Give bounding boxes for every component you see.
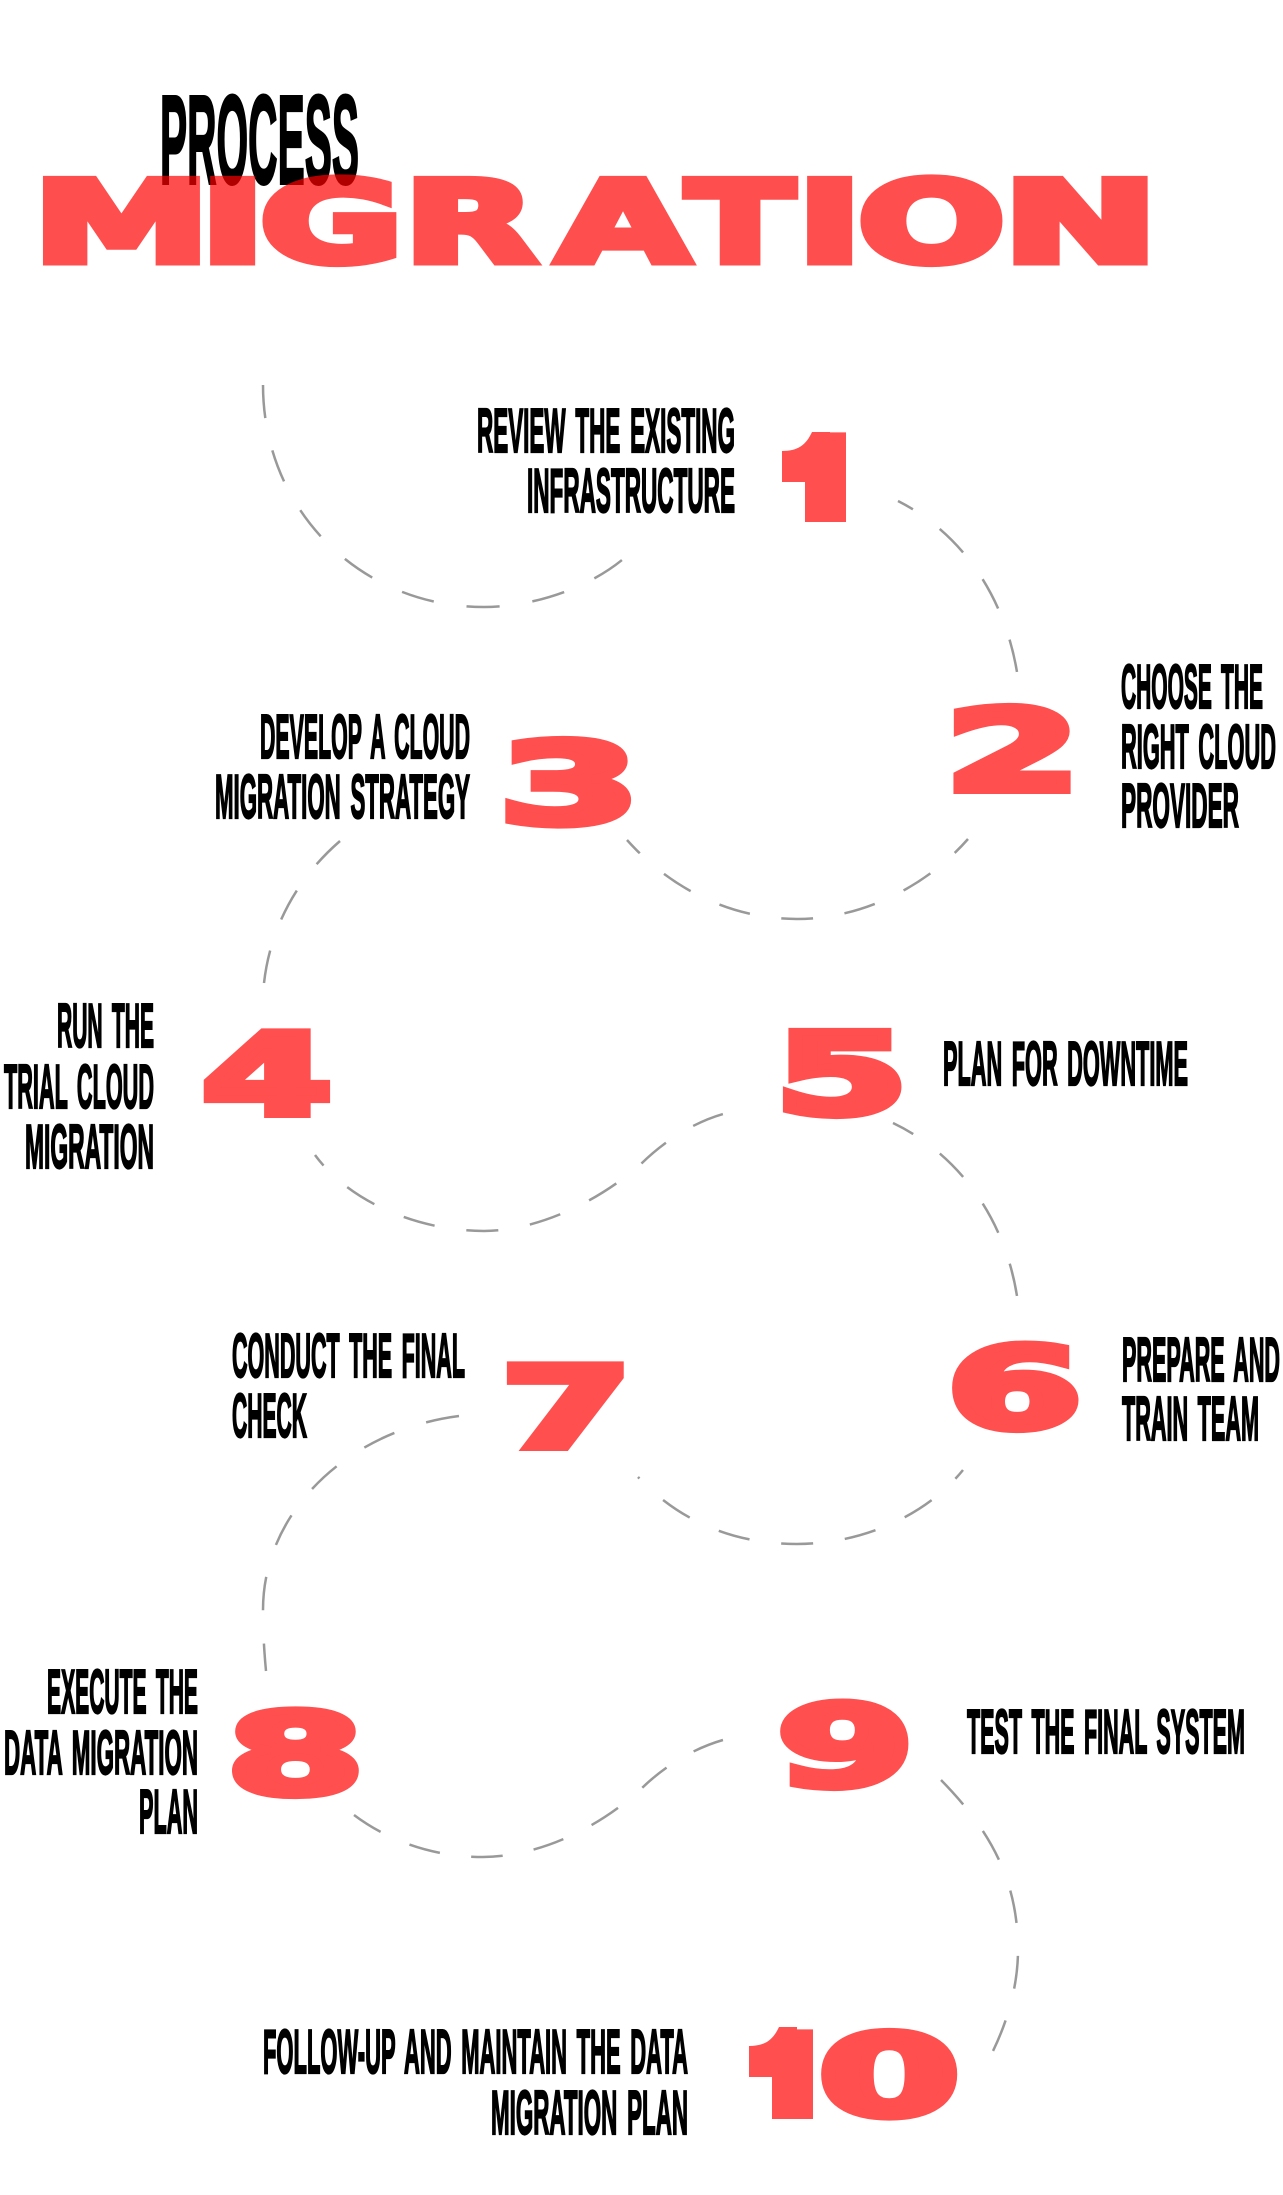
text: INFRASTRUCTURE bbox=[527, 456, 735, 526]
step 4 number: 4 bbox=[202, 1011, 332, 1141]
step 8 label bbox=[4, 1657, 198, 1847]
text: RUN THE bbox=[57, 991, 154, 1061]
step 8 number: 8 bbox=[227, 1690, 364, 1820]
text: CONDUCT THE FINAL bbox=[232, 1321, 465, 1391]
step 3 label bbox=[215, 702, 470, 832]
heading: migration: M bbox=[33, 158, 210, 288]
step 3 number: 3 bbox=[499, 720, 640, 850]
step 2 label bbox=[1121, 652, 1276, 841]
step 6 label bbox=[1122, 1325, 1280, 1454]
step 6 number: 6 bbox=[947, 1324, 1082, 1454]
heading: migration: O bbox=[858, 158, 1005, 288]
step 7 label: CHECK bbox=[232, 1381, 307, 1451]
step 10 number: 1 bbox=[727, 2012, 849, 2142]
text: TRIAL CLOUD bbox=[4, 1052, 154, 1122]
heading: migration: G bbox=[260, 158, 403, 288]
text: EXECUTE THE bbox=[47, 1657, 198, 1727]
heading: migration: R bbox=[404, 158, 536, 288]
text: MIGRATION bbox=[25, 1112, 154, 1182]
heading: migration: I bbox=[797, 158, 862, 288]
heading: migration: A bbox=[557, 158, 689, 288]
text: DATA MIGRATION bbox=[4, 1718, 198, 1788]
step 10 number bbox=[749, 2027, 958, 2121]
step 7 number: 7 bbox=[501, 1344, 632, 1474]
step 1 number: 1 bbox=[760, 415, 882, 545]
step 5 number: 5 bbox=[775, 1010, 908, 1140]
step 10 label bbox=[263, 2017, 688, 2148]
text: MIGRATION STRATEGY bbox=[215, 762, 470, 832]
text: PROCESS bbox=[160, 70, 359, 210]
text: DEVELOP A CLOUD bbox=[260, 702, 470, 772]
text: PLAN bbox=[139, 1777, 198, 1847]
heading: migration: T bbox=[687, 158, 794, 288]
heading: migration: N bbox=[1003, 158, 1158, 288]
text: REVIEW THE EXISTING bbox=[477, 396, 735, 466]
step 4 label bbox=[4, 991, 154, 1182]
step 1 label bbox=[477, 396, 735, 526]
step 9 number: 9 bbox=[777, 1682, 914, 1812]
step 10 number: 0 bbox=[819, 2012, 960, 2142]
step 7 label bbox=[232, 1321, 465, 1451]
step 1 number bbox=[782, 432, 846, 522]
heading: migration: I bbox=[200, 158, 265, 288]
text: MIGRATION PLAN bbox=[491, 2078, 688, 2148]
dashed connector path bbox=[263, 385, 1018, 2051]
step 2 number: 2 bbox=[945, 687, 1081, 817]
